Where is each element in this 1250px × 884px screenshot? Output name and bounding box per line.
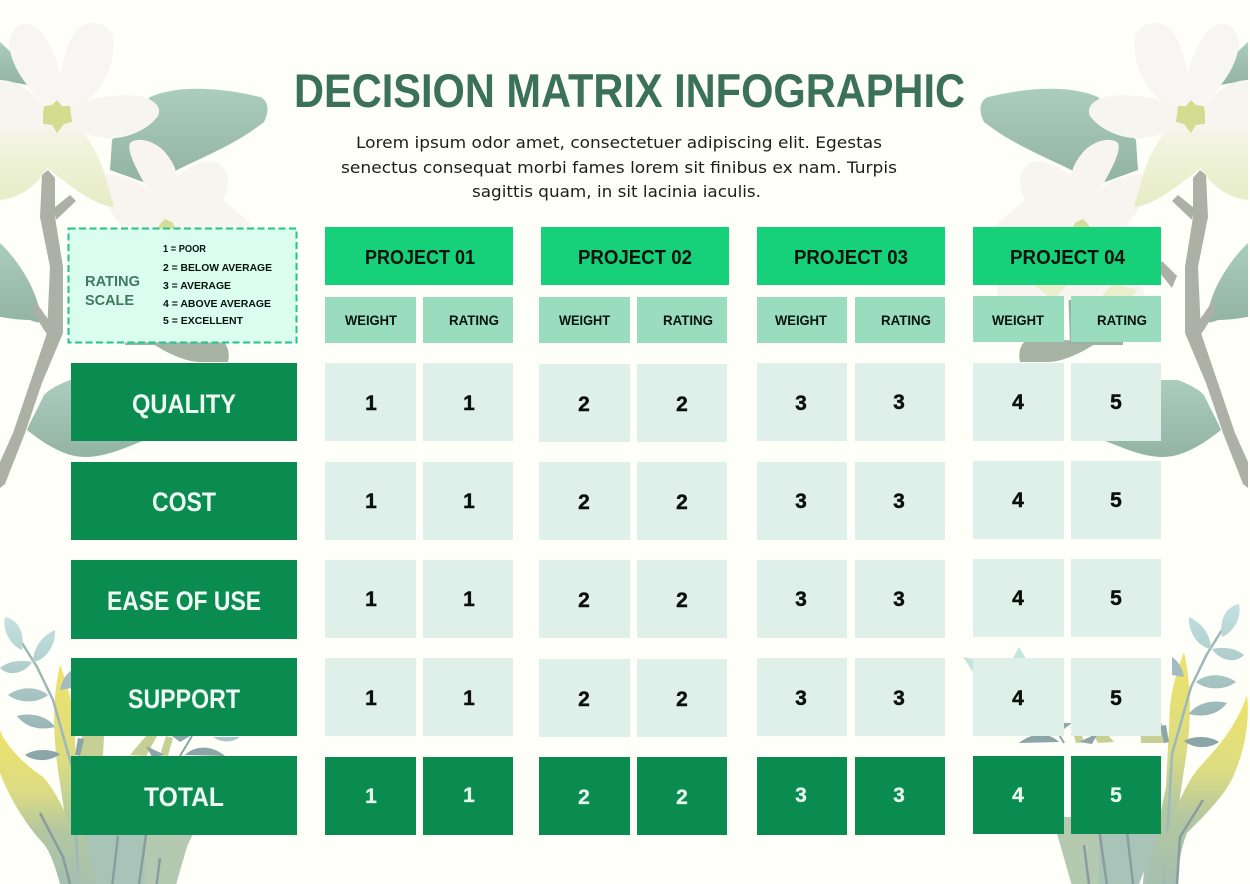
- panel: project 04 header: WEIGHT: [992, 312, 1044, 328]
- panel: project 03 header: PROJECT 03: [794, 246, 908, 269]
- ratings: project 01: 1: [463, 490, 475, 513]
- panel: project 04 header: PROJECT 04: [1010, 246, 1126, 269]
- ratings: project 03: 3: [795, 392, 807, 415]
- ratings: project 02: 2: [676, 491, 688, 514]
- illustration: flowering branch top left: [0, 23, 267, 488]
- panel: project 03 header: WEIGHT: [775, 312, 827, 328]
- intro paragraph: [341, 133, 897, 201]
- ratings: project 01: [325, 363, 513, 835]
- panel: rating scale: SCALE: [85, 292, 134, 309]
- row label: support: [71, 658, 297, 736]
- ratings: project 03: 3: [893, 490, 905, 513]
- panel: rating scale: [68, 228, 296, 342]
- ratings: project 04: 4: [1012, 587, 1024, 610]
- title: DECISION MATRIX INFOGRAPHIC: [294, 64, 965, 117]
- panel: project 02 header: RATING: [663, 312, 713, 328]
- panel: rating scale: 5 = EXCELLENT: [163, 315, 244, 327]
- ratings: project 04: 5: [1110, 391, 1122, 414]
- ratings: project 04: 4: [1012, 784, 1024, 807]
- row label: ease of use: EASE OF USE: [107, 586, 261, 616]
- panel: project 03 header: RATING: [881, 312, 931, 328]
- ratings: project 02: 2: [578, 393, 590, 416]
- panel: project 04 header: RATING: [1097, 312, 1147, 328]
- ratings: project 03: 3: [795, 784, 807, 807]
- ratings: project 04: 5: [1110, 687, 1122, 710]
- ratings: project 01: 1: [365, 785, 377, 808]
- ratings: project 04: 4: [1012, 687, 1024, 710]
- row label: cost: COST: [152, 487, 216, 517]
- row label: quality: [71, 363, 297, 441]
- ratings: project 04: 4: [1012, 489, 1024, 512]
- ratings: project 04: 5: [1110, 489, 1122, 512]
- ratings: project 03: 3: [893, 784, 905, 807]
- intro paragraph: senectus consequat morbi fames lorem sit finibus ex nam. Turpis: [341, 158, 897, 177]
- illustration: foliage bottom left: [0, 617, 240, 884]
- row label: ease of use: [71, 560, 297, 639]
- ratings: project 04: [973, 363, 1161, 834]
- ratings: project 03: [757, 363, 945, 835]
- row label: total: TOTAL: [144, 782, 224, 812]
- panel: rating scale: 2 = BELOW AVERAGE: [163, 262, 272, 274]
- intro paragraph: sagittis quam, in sit lacinia iaculis.: [472, 182, 761, 201]
- row label: cost: [71, 462, 297, 540]
- panel: project 02 header: WEIGHT: [559, 312, 610, 328]
- ratings: project 03: 3: [893, 391, 905, 414]
- ratings: project 02: 2: [676, 688, 688, 711]
- ratings: project 01: 1: [463, 687, 475, 710]
- ratings: project 03: 3: [795, 490, 807, 513]
- ratings: project 01: 1: [463, 784, 475, 807]
- ratings: project 03: 3: [795, 687, 807, 710]
- illustration: pale sprig behind project 04: [963, 647, 1028, 690]
- ratings: project 02: 2: [578, 688, 590, 711]
- panel: project 02 header: PROJECT 02: [578, 246, 692, 269]
- panel: project 01 header: PROJECT 01: [365, 246, 475, 269]
- ratings: project 01: 1: [463, 392, 475, 415]
- row label: total: [71, 756, 297, 835]
- ratings: project 03: 3: [795, 588, 807, 611]
- ratings: project 02: 2: [578, 786, 590, 809]
- ratings: project 02: 2: [578, 589, 590, 612]
- ratings: project 01: 1: [365, 392, 377, 415]
- ratings: project 01: 1: [365, 588, 377, 611]
- ratings: project 01: 1: [365, 490, 377, 513]
- ratings: project 02: 2: [676, 393, 688, 416]
- intro paragraph: Lorem ipsum odor amet, consectetuer adipiscing elit. Egestas: [356, 133, 882, 152]
- ratings: project 03: 3: [893, 588, 905, 611]
- panel: project 04 header: [973, 227, 1161, 342]
- ratings: project 02: 2: [578, 491, 590, 514]
- ratings: project 01: 1: [463, 588, 475, 611]
- ratings: project 04: 5: [1110, 784, 1122, 807]
- ratings: project 01: 1: [365, 687, 377, 710]
- row label: support: SUPPORT: [128, 684, 240, 714]
- ratings: project 02: 2: [676, 786, 688, 809]
- ratings: project 04: 5: [1110, 587, 1122, 610]
- panel: project 01 header: RATING: [449, 312, 499, 328]
- panel: rating scale: 1 = POOR: [163, 243, 206, 255]
- panel: project 02 header: [539, 227, 729, 343]
- ratings: project 02: [539, 364, 727, 835]
- ratings: project 03: 3: [893, 687, 905, 710]
- ratings: project 04: 4: [1012, 391, 1024, 414]
- row label: quality: QUALITY: [132, 389, 236, 419]
- panel: rating scale: 3 = AVERAGE: [163, 280, 231, 292]
- ratings: project 02: 2: [676, 589, 688, 612]
- panel: rating scale: 4 = ABOVE AVERAGE: [163, 298, 271, 310]
- panel: project 01 header: [325, 227, 513, 343]
- panel: project 01 header: WEIGHT: [345, 312, 397, 328]
- panel: project 03 header: [757, 227, 945, 343]
- illustration: foliage bottom right: [1004, 604, 1248, 884]
- illustration: flowering branch top right: [981, 23, 1248, 488]
- panel: rating scale: RATING: [85, 273, 140, 290]
